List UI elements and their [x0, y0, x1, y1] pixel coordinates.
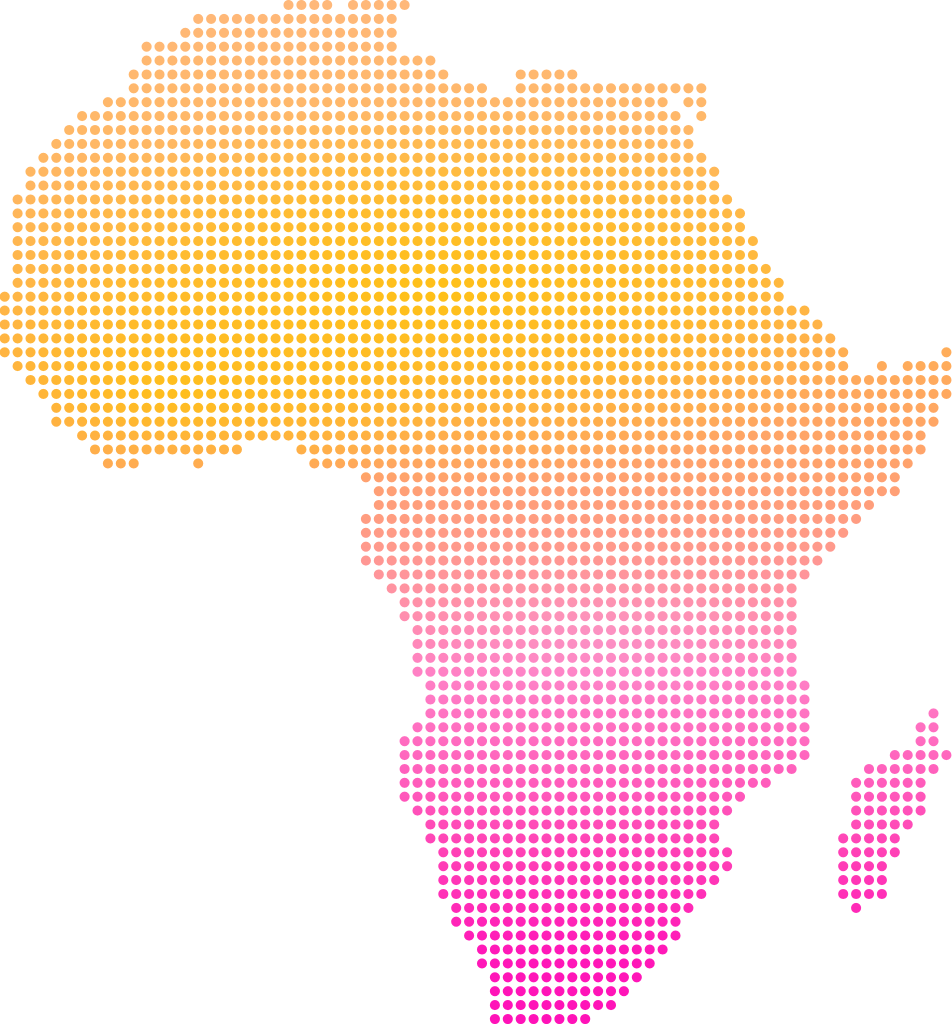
map: Madagascar dots [836, 706, 952, 916]
